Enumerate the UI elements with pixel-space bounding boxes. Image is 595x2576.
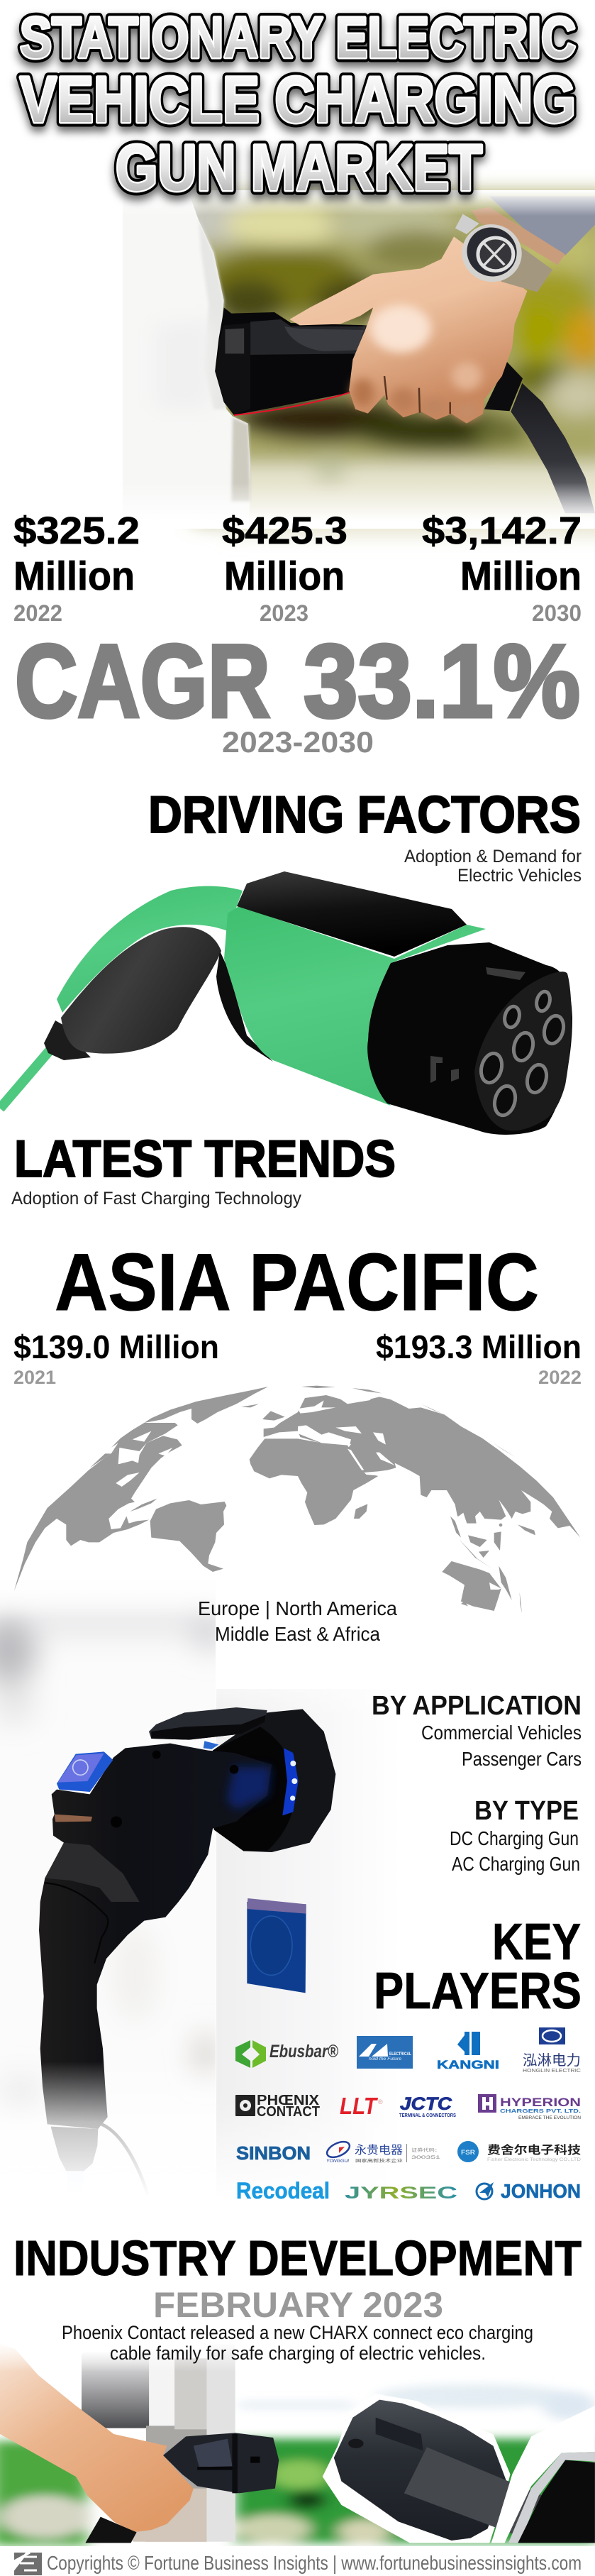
CAGR: 33.1%: [304, 623, 580, 739]
logo: Jonhon: JONHON: [501, 2180, 581, 2202]
logo: JCTC: JCTC: [400, 2094, 452, 2114]
title: GUN MARKET: [116, 132, 482, 204]
logo: Fisher Electronic: [457, 2141, 581, 2162]
region heading: ASIA PACIFIC: [55, 1238, 539, 1328]
logo: Yonggui: 永贵电器: [355, 2144, 403, 2157]
segments: by type: [450, 1796, 580, 1875]
logo: LLT: ®: [378, 2098, 383, 2106]
key players heading: KEY: [492, 1914, 581, 1971]
logo: Yonggui: YONGGUI: [326, 2159, 349, 2164]
logo: Fisher Electronic: FSR: [461, 2149, 476, 2156]
other regions: [198, 1597, 397, 1645]
cable strain relief: [51, 2127, 98, 2171]
segments: by application: [372, 1691, 582, 1770]
development text: cable family for safe charging of electric vehicles.: [110, 2343, 486, 2364]
logo: Phoenix Contact: [235, 2093, 320, 2120]
north america: [14, 1436, 182, 1591]
region values: $193.3 Million: [376, 1328, 582, 1365]
logo: JCTC: [399, 2094, 456, 2118]
logo: Hyperion Chargers: EMBRACE THE EVOLUTION: [518, 2115, 581, 2120]
logo: Hyperion Chargers: CHARGERS PVT. LTD.: [500, 2108, 581, 2114]
value 2023: $425.3: [222, 510, 347, 552]
value 2022: 2022: [13, 600, 62, 626]
asian islands: [518, 1524, 535, 1535]
logo: JYRSEC: JYRSEC: [345, 2184, 457, 2203]
value 2023: 2023: [260, 600, 308, 626]
logo: Hyperion Chargers: HYPERION: [500, 2096, 581, 2109]
logo: Phoenix Contact: PHŒNIX: [257, 2093, 320, 2108]
value 2022: [13, 510, 140, 626]
segments: by type: BY TYPE: [474, 1796, 579, 1826]
logo: Yonggui: 300351: [411, 2155, 441, 2160]
logo: AG Electrical: ELECTRICAL: [389, 2052, 411, 2057]
logo: Sinbon: SINBON: [236, 2142, 311, 2164]
driving factors text: Electric Vehicles: [457, 866, 582, 886]
logo: Ebusbar: Ebusbar®: [269, 2042, 338, 2062]
driving factors text: [404, 847, 582, 886]
driving factors heading: [148, 786, 582, 886]
logo: Recodeal: Recodeal: [236, 2178, 330, 2203]
logo: Yonggui: 证券代码：: [411, 2147, 440, 2153]
segments: by application: BY APPLICATION: [372, 1691, 582, 1721]
development date: FEBRUARY 2023: [153, 2285, 443, 2325]
development text: Phoenix Contact released a new CHARX connect eco charging: [62, 2322, 533, 2343]
key players heading: [374, 1914, 582, 2020]
value 2023: [222, 510, 347, 626]
latest trends text: Adoption of Fast Charging Technology: [11, 1189, 301, 1209]
hero photo: hand holding charging gun: [0, 190, 595, 534]
CAGR period: 2023-2030: [222, 725, 374, 759]
logo: Kangni: [437, 2032, 499, 2071]
logo: Yonggui: 国家高新技术企业: [355, 2158, 403, 2164]
other regions: Middle East & Africa: [215, 1623, 380, 1645]
region values: [13, 1328, 582, 1388]
key player logos: [235, 2027, 581, 2203]
logo: Yonggui: [325, 2139, 441, 2164]
leds: [282, 1748, 299, 1815]
logo: Kangni: KANGNI: [437, 2058, 499, 2071]
logo: Honglin Electric: HONGLIN ELECTRIC: [523, 2069, 581, 2074]
other regions: Europe | North America: [198, 1597, 397, 1619]
gun body: [39, 1744, 272, 2129]
icon: green charging plug: [0, 871, 572, 1135]
value 2030: Million: [460, 554, 582, 599]
value 2023: Million: [224, 554, 345, 599]
market values: [13, 510, 582, 626]
region values: $139.0 Million: [13, 1328, 219, 1365]
title: [20, 6, 576, 204]
africa: [250, 1438, 378, 1525]
logo: AG Electrical: [357, 2036, 413, 2069]
logo: AG Electrical: hold the Future: [369, 2057, 402, 2062]
logo: Honglin Electric: [523, 2027, 581, 2074]
logo: Ebusbar: [235, 2040, 338, 2068]
logo: Phoenix Contact: CONTACT: [257, 2104, 320, 2120]
logo: Hyperion Chargers: [478, 2094, 581, 2120]
photo: wall mounted charging gun: [0, 1707, 401, 2211]
CAGR: CAGR: [15, 623, 270, 739]
australia: [442, 1561, 501, 1611]
driving factors text: Adoption & Demand for: [404, 847, 582, 866]
bottom photo: charging a car: [0, 2342, 595, 2545]
arctic islands: [301, 1386, 335, 1388]
CAGR: [15, 623, 580, 759]
value 2022: $325.2: [13, 510, 140, 552]
value 2022: Million: [13, 554, 135, 599]
icon: Fortune Business Insights logo: [14, 2553, 42, 2575]
latest trends: [11, 1130, 396, 1209]
region values: 2021: [13, 1367, 56, 1388]
inland seas: [298, 1400, 501, 1590]
socket flap: [149, 1707, 267, 1740]
value 2030: [422, 510, 582, 626]
blue rfid square: [247, 1902, 306, 1993]
value 2030: 2030: [532, 600, 582, 626]
logo: JCTC: TERMINAL & CONNECTORS: [399, 2112, 456, 2118]
wall socket disc: [213, 1709, 335, 1852]
south america: [150, 1500, 226, 1572]
latest trends: LATEST TRENDS: [14, 1130, 396, 1188]
blue button: [57, 1751, 113, 1792]
world map: [14, 1386, 580, 1613]
logo: Fisher Electronic: 费舍尔电子科技: [487, 2143, 581, 2157]
charger photo background: [0, 1577, 401, 2200]
title: GUN MARKET: [116, 132, 482, 204]
eurasia: [264, 1395, 580, 1538]
value 2030: $3,142.7: [422, 510, 582, 552]
madagascar: [354, 1504, 367, 1519]
region values: 2022: [538, 1367, 582, 1388]
logo: Honglin Electric: 泓淋电力: [523, 2052, 581, 2069]
development text: [62, 2322, 533, 2364]
logo: LLT: LLT: [340, 2093, 379, 2119]
logo: Fisher Electronic: Fisher Electronic Technology CO.,LTD: [487, 2157, 581, 2162]
